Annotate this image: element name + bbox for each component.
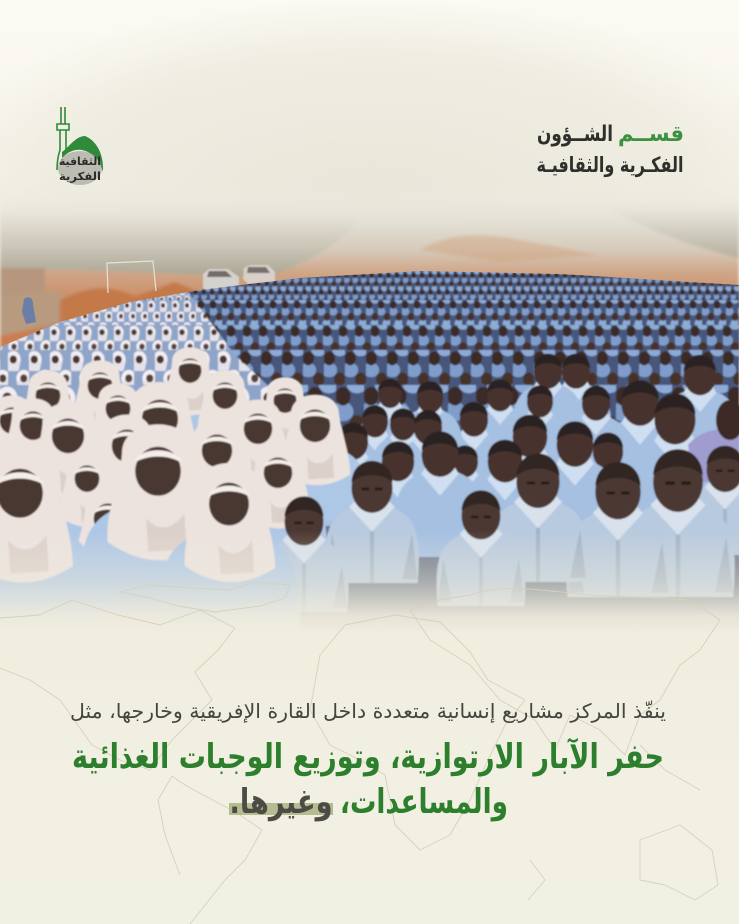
front girls — [78, 502, 112, 547]
department title: الشــؤون — [537, 122, 613, 147]
logo: minaret and dome with calligraphy — [57, 107, 103, 185]
intro sentence: ينفّذ المركز مشاريع إنسانية متعددة داخل القارة الإفريقية وخارجها، مثل — [70, 699, 666, 724]
logo: minaret and dome with calligraphy: الفكرية — [59, 170, 101, 183]
goal post — [107, 261, 156, 293]
highlighted heading: والمساعدات، — [340, 782, 508, 822]
distant hillside and red ground — [0, 185, 739, 360]
world map outline — [0, 582, 720, 924]
person at left edge — [22, 297, 36, 324]
department title: الفكـرية والثقافيـة — [536, 153, 684, 177]
photo: schoolchildren gathered on red earth — [0, 185, 739, 636]
logo: minaret and dome with calligraphy: الثقافية — [59, 155, 101, 168]
highlight bar — [229, 803, 333, 815]
department title — [536, 122, 684, 177]
calligraphy — [58, 151, 102, 185]
mid-row boys — [678, 354, 739, 455]
crowd background rows — [0, 270, 739, 632]
upper girls — [26, 370, 70, 408]
front boys — [699, 444, 739, 556]
highlighted heading — [72, 737, 664, 822]
parked cars — [203, 265, 275, 292]
central haze behind the header — [0, 0, 739, 340]
minaret — [57, 107, 69, 170]
front rows: girls in white hijabs, boys in blue shirts — [0, 347, 739, 636]
fade into background at bottom — [0, 530, 739, 634]
highlighted heading: وغيرها. — [230, 782, 332, 822]
department title: قســم — [618, 122, 684, 147]
dome — [62, 136, 103, 172]
purple shirt boy — [688, 428, 739, 482]
